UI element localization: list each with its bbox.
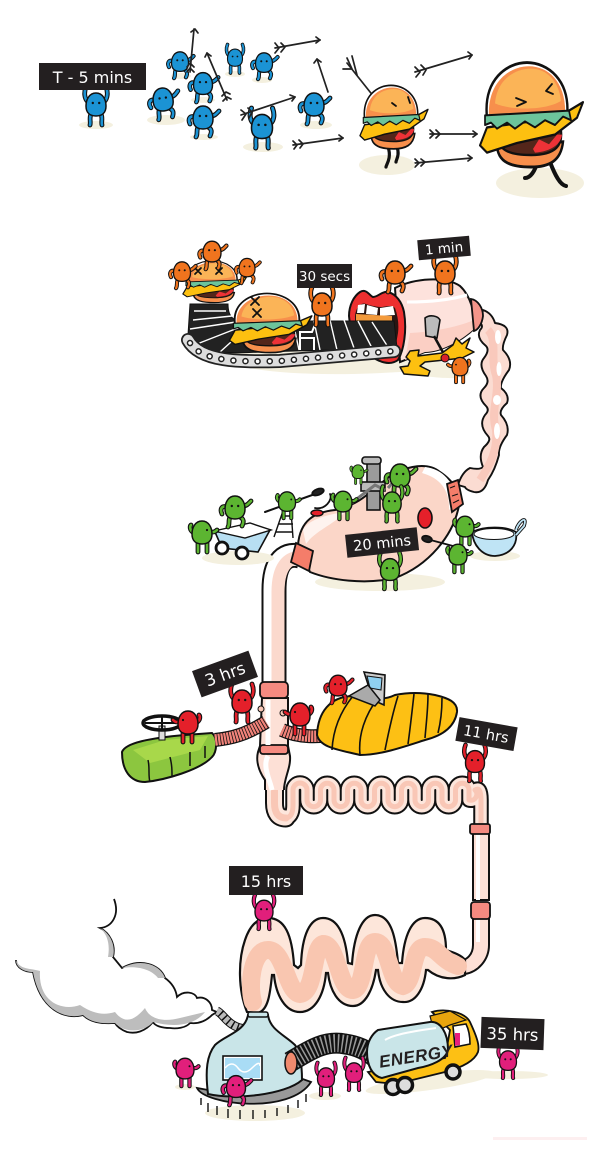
lower pipe from stomach (274, 555, 302, 690)
large intestine (240, 915, 465, 1013)
red stomach port (311, 510, 323, 516)
energy machine (197, 1012, 311, 1121)
critter shadows (175, 1071, 548, 1100)
blue critters (85, 44, 330, 148)
sign: 20 mins: 20 mins (353, 533, 412, 555)
stomach pipe flange (291, 543, 313, 571)
sign: 30 secs: 30 secs (299, 269, 350, 285)
red lips mouth (349, 291, 405, 363)
red button (418, 508, 432, 528)
sign: 11 hrs (455, 717, 518, 751)
grinder body (395, 279, 483, 362)
top neck pipe flange (447, 480, 463, 512)
sign: 35 hrs: 35 hrs (486, 1024, 539, 1045)
junction pipe with flanges (257, 682, 290, 790)
ladder (274, 508, 293, 538)
crank handle and yellow blades (400, 316, 474, 376)
pipe: wobbly gullet (458, 310, 510, 492)
grey valve column (345, 457, 410, 510)
sign: T - 5 mins (39, 63, 146, 90)
serpentine small intestine (274, 770, 481, 825)
energy truck (365, 1010, 495, 1099)
sign: 15 hrs (229, 866, 303, 895)
lower pipe and flanges (462, 824, 490, 974)
calculator laptop (349, 672, 385, 706)
section: stomach, green critters (190, 457, 525, 690)
red bile hoses (215, 722, 340, 740)
section: small intestine and liver/gallbladder, red critters (122, 651, 518, 974)
conveyor belt (188, 304, 397, 361)
mixing bowl (470, 520, 525, 561)
burger on the belt with dead x eyes (183, 261, 247, 303)
sign: 3 hrs: 3 hrs (202, 658, 248, 691)
section: large intestine, smoke and energy, pink critters (16, 866, 548, 1121)
cloud of smoke (16, 899, 217, 1033)
critter shadows (79, 71, 332, 152)
faint footer strip (493, 1137, 587, 1140)
green critters (190, 464, 478, 589)
wheeled cart (202, 523, 274, 565)
sign: 11 hrs: 11 hrs (462, 723, 510, 747)
stomach shadow (315, 573, 445, 591)
small burger running (359, 85, 428, 175)
sign: 30 secs (297, 264, 352, 288)
stomach tank (298, 466, 459, 581)
pink critters (174, 895, 518, 1105)
yellow pancreas tank (317, 693, 457, 755)
section: T minus 5 mins, blue critters spearing the burger (39, 29, 584, 198)
sign: 15 hrs: 15 hrs (241, 872, 291, 891)
sign: T - 5 mins: T - 5 mins (52, 68, 132, 87)
orange critters (170, 241, 469, 382)
sign: 1 min: 1 min (424, 239, 464, 259)
ENERGY text: ENERGY (378, 1041, 456, 1072)
ribbed hose to truck (285, 1043, 378, 1074)
red critters (173, 675, 486, 781)
sign: 35 hrs (480, 1017, 545, 1050)
green gallbladder tank (122, 733, 216, 782)
sign: 1 min (417, 236, 471, 260)
small chair (300, 322, 316, 350)
sign: 20 mins (345, 527, 419, 558)
large burger on the belt (229, 293, 312, 353)
shadow under conveyor (190, 345, 470, 378)
smoke exhaust hose (217, 1011, 247, 1029)
arrows thrown at burger (187, 29, 477, 167)
section: mouth and conveyor, orange critters (170, 236, 510, 492)
long spoons (265, 487, 468, 550)
valve wheel (143, 716, 181, 740)
big burger running (480, 63, 584, 198)
sign: 3 hrs (192, 651, 258, 697)
